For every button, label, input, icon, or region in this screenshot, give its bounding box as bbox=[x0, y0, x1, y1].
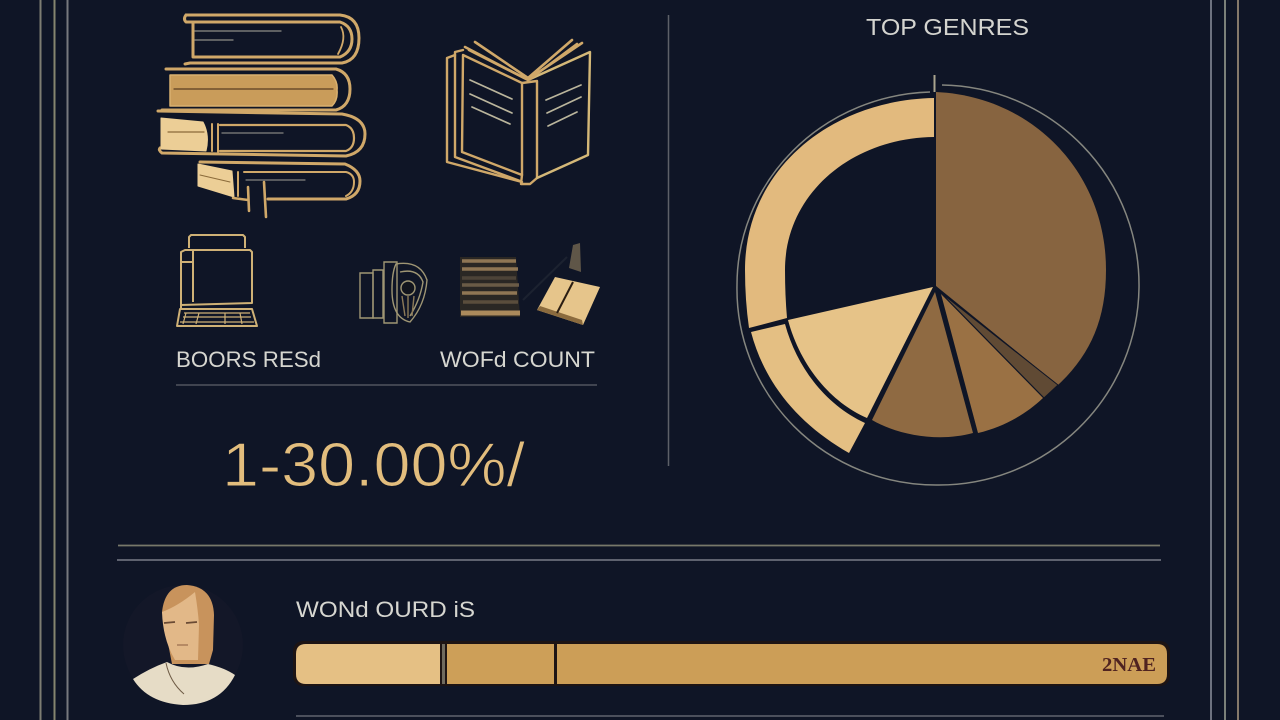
segment: first bbox=[296, 644, 440, 684]
icon: stack of books bbox=[158, 15, 365, 217]
label: word count: WOFd COUNT bbox=[440, 347, 595, 372]
label: books read: BOORS RESd bbox=[176, 347, 321, 372]
outer ring bbox=[737, 85, 1139, 485]
divider under labels bbox=[176, 384, 597, 386]
largest slice bbox=[936, 92, 1106, 385]
pie chart: top genres bbox=[737, 75, 1139, 485]
segment: third bbox=[557, 644, 1167, 684]
pale wedge bbox=[788, 287, 933, 418]
pale arc bbox=[745, 98, 934, 328]
slice: lower right bbox=[941, 294, 1043, 433]
icon: sketched books bbox=[360, 262, 427, 323]
big statistic: 1-30.00%/ bbox=[222, 431, 526, 500]
segment: second bbox=[447, 644, 554, 684]
small dark slice bbox=[940, 292, 1058, 398]
icon: laptop bbox=[177, 235, 257, 326]
segment: separator bbox=[442, 644, 445, 684]
bar value: 2NAE bbox=[1102, 654, 1156, 676]
icon: open book bbox=[447, 40, 590, 184]
avatar: reader portrait bbox=[123, 585, 243, 705]
slice: bottom bbox=[872, 292, 973, 437]
pale lower arc bbox=[751, 324, 865, 453]
icon: books and pen bbox=[460, 243, 600, 325]
top tick bbox=[934, 75, 936, 92]
heading: top genres: TOP GENRES bbox=[866, 14, 1029, 40]
progress bar bbox=[293, 641, 1170, 686]
label: word counts: WONd OURD iS bbox=[296, 597, 475, 622]
